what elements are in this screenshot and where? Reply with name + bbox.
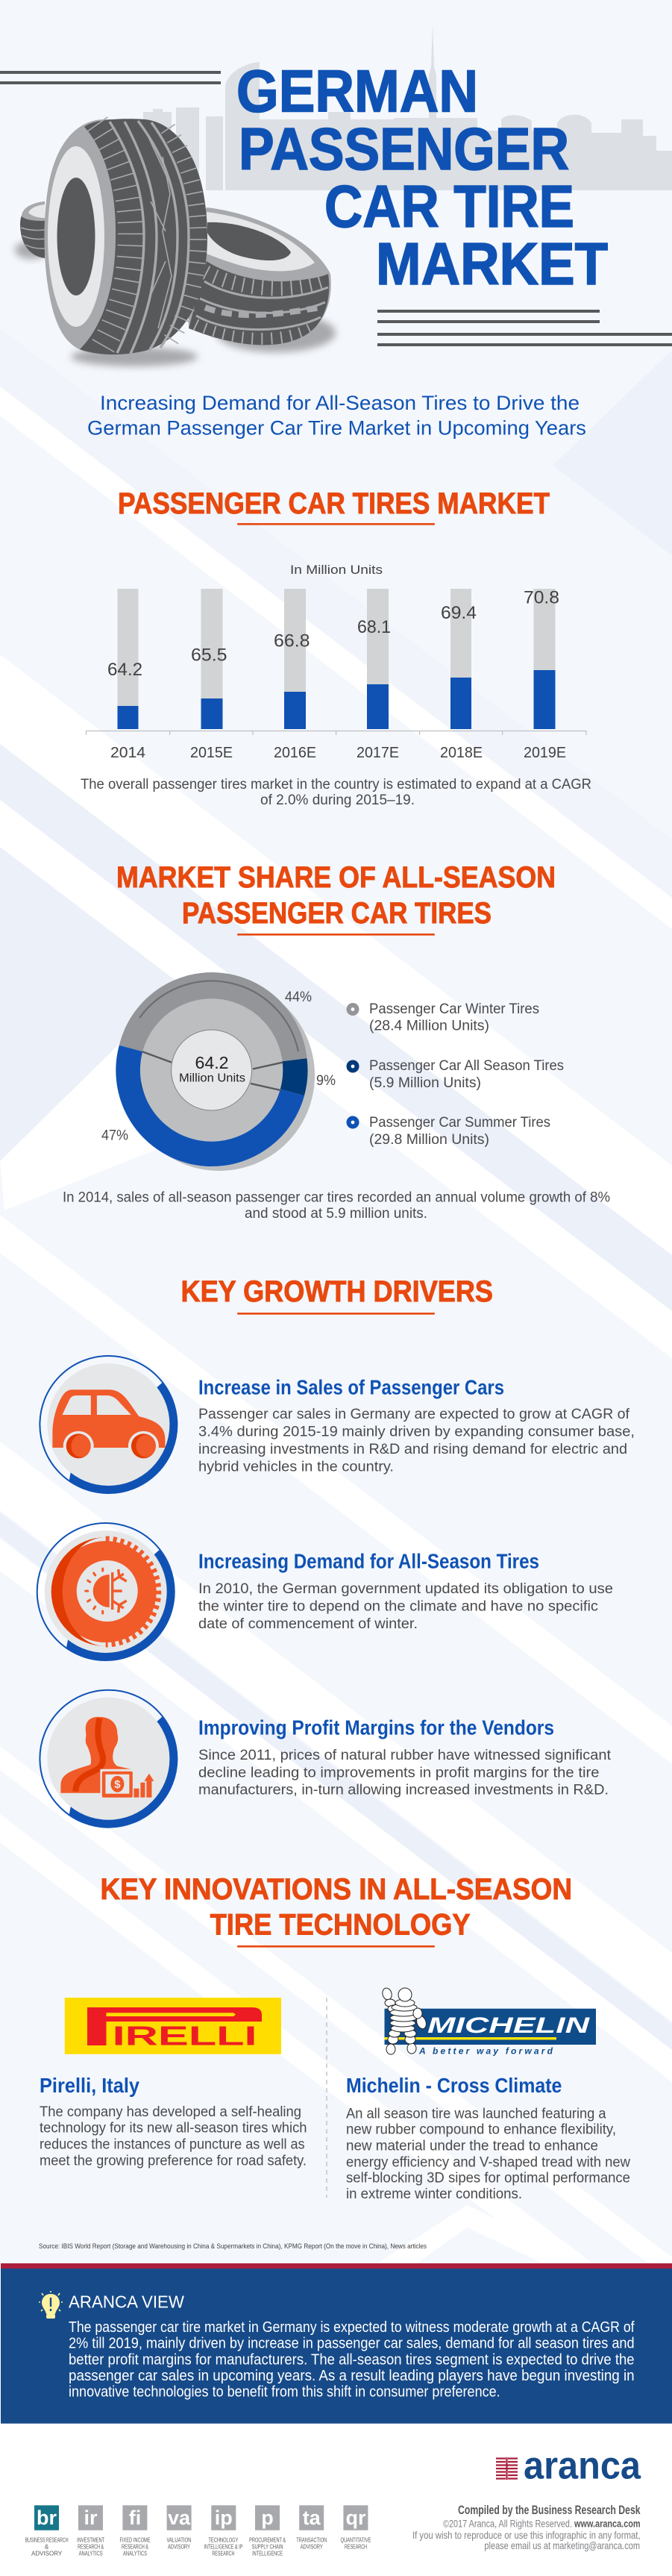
bar chart: 70.8 <box>524 588 559 608</box>
driver 3 text: Since 2011, prices of natural rubber have witnessed significant <box>198 1748 612 1763</box>
driver 2 text: date of commencement of winter. <box>198 1616 418 1632</box>
innovation: michelin text: energy efficiency and V-shaped tread with new <box>346 2154 630 2170</box>
bar chart <box>87 588 586 761</box>
service tiles: ANALYTICS <box>123 2551 147 2557</box>
bar chart: 2019E <box>524 745 566 761</box>
footer credits <box>412 2503 641 2551</box>
service tiles: p <box>261 2507 274 2529</box>
title: decorative rule lines <box>0 71 672 346</box>
innovation: michelin text: in extreme winter conditions. <box>346 2186 522 2202</box>
legend <box>346 1001 564 1148</box>
skyline <box>143 24 672 190</box>
icon: all-season tire <box>37 1523 175 1660</box>
service tiles: INTELLIGENCE <box>252 2551 283 2557</box>
footer credits: www.aranca.com <box>574 2518 641 2530</box>
service tiles: INTELLIGENCE & IP <box>204 2544 242 2551</box>
service tiles: RESEARCH & <box>122 2544 148 2551</box>
service tiles: ADVISORY <box>168 2544 190 2551</box>
title: GERMAN <box>236 58 478 124</box>
chart note <box>81 777 591 808</box>
service tiles: ir <box>84 2507 98 2529</box>
icon: profit margins person <box>40 1690 177 1828</box>
service tiles: FIXED INCOME <box>119 2537 151 2544</box>
legend: (28.4 Million Units) <box>369 1019 489 1034</box>
innovation: michelin text <box>346 2074 630 2202</box>
service tiles: BUSINESS RESEARCH <box>25 2537 69 2544</box>
driver 3 text: manufacturers, in-turn allowing increased investments in R&D. <box>198 1782 609 1798</box>
heading: market share: MARKET SHARE OF ALL-SEASON <box>116 861 556 894</box>
service tiles: fi <box>129 2507 141 2529</box>
driver 1 text: increasing investments in R&D and rising demand for electric and <box>198 1442 627 1457</box>
logo: michelin <box>381 1987 596 2056</box>
donut chart: 44% <box>285 990 312 1005</box>
driver 1 text <box>198 1375 635 1475</box>
service tiles: TECHNOLOGY <box>208 2537 239 2544</box>
service tiles: SUPPLY CHAIN <box>252 2544 283 2551</box>
service tiles: RESEARCH <box>212 2551 235 2557</box>
bar chart: 2017E <box>357 745 399 761</box>
logo: michelin: MICHELIN <box>427 2013 591 2038</box>
icon: car <box>40 1356 177 1493</box>
legend: Passenger Car Winter Tires <box>369 1001 539 1017</box>
driver 3 text: Improving Profit Margins for the Vendors <box>198 1716 554 1739</box>
innovation: michelin text: new material under the tread to enhance <box>346 2138 598 2154</box>
service tiles: ANALYTICS <box>79 2551 103 2557</box>
driver 2 text: the winter tire to depend on the climate and have no specific <box>198 1599 598 1615</box>
icon: michelin man <box>381 1987 428 2054</box>
donut chart: 64.2 <box>195 1053 228 1072</box>
bar chart: 69.4 <box>441 603 477 623</box>
title <box>236 58 608 297</box>
service tiles: ta <box>303 2507 321 2529</box>
subtitle: Increasing Demand for All-Season Tires to Drive the <box>100 392 580 414</box>
bar chart: 2016E <box>274 745 316 761</box>
bar chart: 2015E <box>190 745 233 761</box>
service tiles: RESEARCH & <box>78 2544 104 2551</box>
legend: Passenger Car All Season Tires <box>369 1058 564 1074</box>
donut note: In 2014, sales of all-season passenger car tires recorded an annual volume growth of 8% <box>63 1189 610 1205</box>
innovation: michelin text: Michelin - Cross Climate <box>346 2074 562 2097</box>
service tiles: & <box>45 2544 49 2551</box>
heading: key innovations: TIRE TECHNOLOGY <box>210 1909 471 1942</box>
driver 3 text: decline leading to improvements in profit margins for the tire <box>198 1765 600 1781</box>
heading: key growth drivers: KEY GROWTH DRIVERS <box>180 1275 493 1308</box>
title: MARKET <box>376 231 608 297</box>
donut note <box>63 1189 610 1222</box>
service tiles: ip <box>215 2507 233 2529</box>
panel: aranca view <box>1 2263 672 2424</box>
heading: key innovations: KEY INNOVATIONS IN ALL-SEASON <box>100 1873 572 1906</box>
footer credits: ©2017 Aranca, All Rights Reserved. <box>443 2518 572 2530</box>
source line: Source: IBIS World Report (Storage and Warehousing in China & Supermarkets in China), KPMG Report (On the move in China), News articles <box>39 2242 427 2251</box>
panel: aranca view: better profit margins for manufacturers. The all-season tires segment is expected to drive the <box>69 2351 635 2368</box>
innovation: pirelli text: reduces the instances of puncture as well as <box>40 2136 305 2152</box>
donut chart: Million Units <box>179 1072 245 1085</box>
heading: market share: PASSENGER CAR TIRES <box>182 897 492 930</box>
subtitle: German Passenger Car Tire Market in Upcoming Years <box>87 416 586 439</box>
chart unit label: In Million Units <box>290 563 383 577</box>
bar chart: 66.8 <box>274 631 310 651</box>
service tiles: QUANTITATIVE <box>340 2537 371 2544</box>
service tiles: INVESTMENT <box>77 2537 104 2544</box>
innovation: michelin text: self-blocking 3D sipes for optimal performance <box>346 2170 630 2186</box>
bar chart: 64.2 <box>107 660 142 680</box>
innovation: michelin text: An all season tire was launched featuring a <box>346 2106 606 2122</box>
driver 1 text: 3.4% during 2015-19 mainly driven by expanding consumer base, <box>198 1424 635 1439</box>
legend: (29.8 Million Units) <box>369 1132 489 1148</box>
driver 2 text: In 2010, the German government updated its obligation to use <box>198 1581 613 1597</box>
heading: passenger car tires market: PASSENGER CAR TIRES MARKET <box>118 487 550 520</box>
innovation: michelin text: new rubber compound to enhance flexibility, <box>346 2122 616 2137</box>
icon: front tire <box>44 119 207 354</box>
service tiles: ADVISORY <box>301 2544 323 2551</box>
logo: pirelli: IRELLI <box>113 2021 257 2051</box>
service tiles: TRANSACTION <box>296 2537 327 2544</box>
bar chart: 2018E <box>440 745 483 761</box>
service tiles: qr <box>346 2507 366 2529</box>
title: CAR TIRE <box>324 173 574 240</box>
innovation: pirelli text: meet the growing preference for road safety. <box>40 2153 307 2169</box>
icon: far tire <box>20 201 45 258</box>
heading: market share <box>116 861 556 936</box>
driver 3 text <box>198 1716 612 1798</box>
bar chart: 2014 <box>110 745 145 761</box>
driver 1 text: Passenger car sales in Germany are expected to grow at CAGR of <box>198 1407 630 1422</box>
donut chart: 47% <box>101 1128 128 1143</box>
donut note: and stood at 5.9 million units. <box>245 1206 427 1222</box>
service tiles: VALUATION <box>167 2537 192 2544</box>
service tiles: RESEARCH <box>345 2544 367 2551</box>
logo: aranca: aranca <box>524 2445 641 2488</box>
illustration: tires <box>15 119 336 366</box>
panel: aranca view: passenger car sales in upcoming years. As a result leading players have begun investing in <box>69 2368 635 2384</box>
donut chart <box>101 972 336 1171</box>
logo: michelin: A better way forward <box>418 2045 553 2056</box>
logo: pirelli <box>65 1998 281 2054</box>
subtitle <box>87 392 586 439</box>
innovation: pirelli text: Pirelli, Italy <box>40 2074 139 2097</box>
title: PASSENGER <box>239 116 569 182</box>
icon: light bulb <box>39 2291 63 2319</box>
driver 1 text: Increase in Sales of Passenger Cars <box>198 1375 504 1398</box>
driver 2 text <box>198 1550 613 1632</box>
panel: aranca view: innovative technologies to benefit from this shift in consumer preference. <box>69 2384 500 2401</box>
divider <box>326 1998 327 2198</box>
chart note: of 2.0% during 2015–19. <box>260 793 415 808</box>
driver 2 text: Increasing Demand for All-Season Tires <box>198 1550 539 1573</box>
service tiles <box>25 2505 371 2557</box>
service tiles: ADVISORY <box>31 2551 63 2557</box>
icon: profit margins person: $ <box>114 1778 121 1791</box>
heading: key innovations <box>100 1873 572 1948</box>
legend: Passenger Car Summer Tires <box>369 1115 550 1131</box>
driver 1 text: hybrid vehicles in the country. <box>198 1459 394 1475</box>
icon: lying tire <box>186 207 331 345</box>
panel: aranca view: ARANCA VIEW <box>69 2292 184 2311</box>
service tiles: PROCUREMENT & <box>249 2537 286 2544</box>
innovation: pirelli text: technology for its new all-season tires which <box>40 2120 307 2136</box>
innovation: pirelli text: The company has developed a self-healing <box>40 2104 301 2120</box>
chart note: The overall passenger tires market in the country is estimated to expand at a CAGR <box>81 777 591 793</box>
donut chart: 9% <box>316 1073 336 1089</box>
service tiles: va <box>168 2507 191 2529</box>
legend: (5.9 Million Units) <box>369 1075 481 1091</box>
bar chart: 68.1 <box>357 617 391 637</box>
innovation: pirelli text <box>40 2074 307 2169</box>
bar chart: 65.5 <box>191 645 227 666</box>
service tiles: br <box>37 2507 57 2529</box>
